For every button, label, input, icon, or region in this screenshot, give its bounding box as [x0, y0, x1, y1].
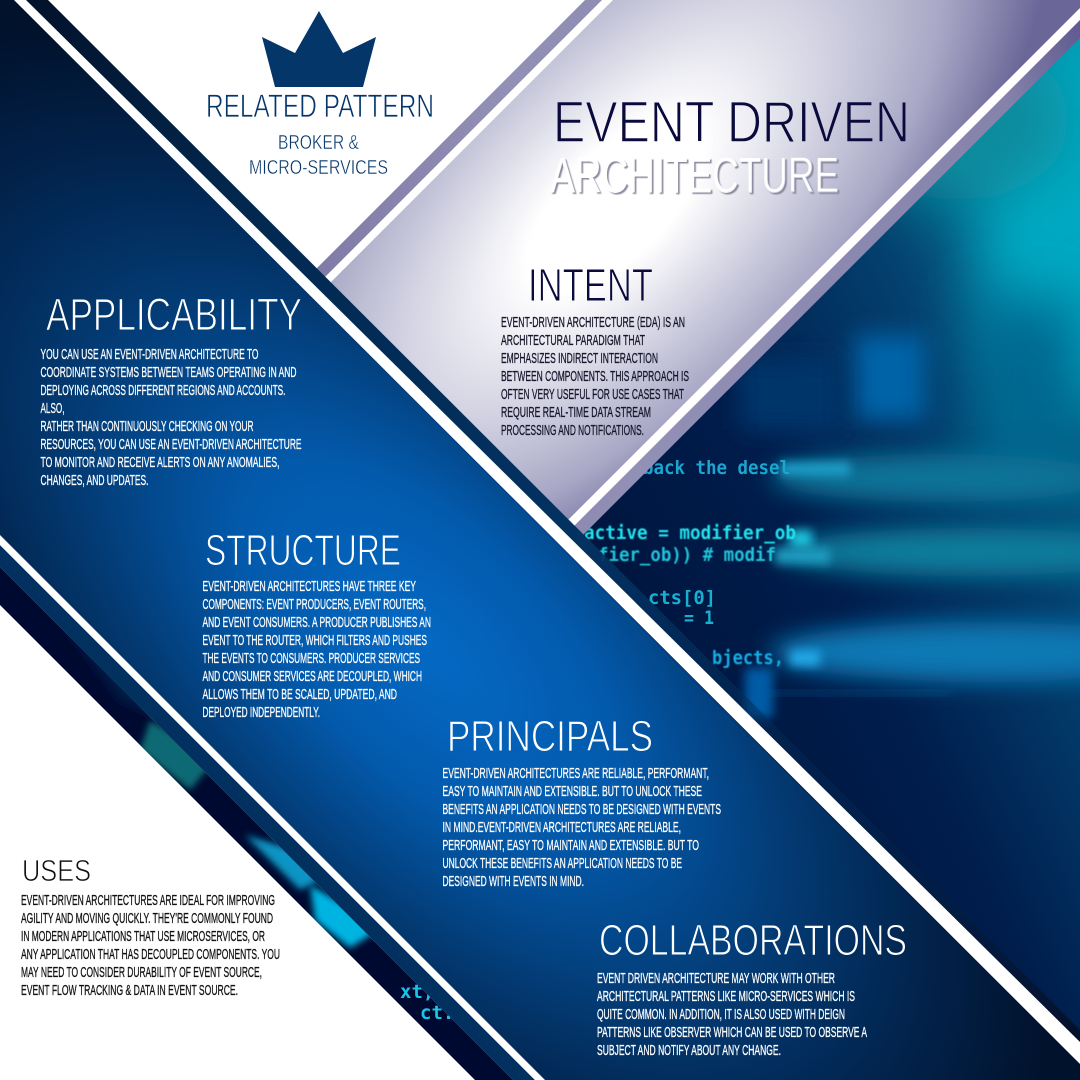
- section: structure: EVENT TO THE ROUTER, WHICH FILTERS AND PUSHES: [202, 632, 427, 649]
- section: uses: ANY APPLICATION THAT HAS DECOUPLED COMPONENTS. YOU: [21, 946, 280, 963]
- section: intent: [501, 259, 689, 439]
- heading: related pattern: BROKER &: [278, 132, 360, 154]
- heading: related pattern: RELATED PATTERN: [206, 88, 434, 124]
- section: structure: STRUCTURE: [205, 526, 401, 575]
- section: principals: IN MIND.EVENT-DRIVEN ARCHITECTURES ARE RELIABLE,: [442, 819, 681, 836]
- section: uses: MAY NEED TO CONSIDER DURABILITY OF EVENT SOURCE,: [21, 964, 262, 981]
- section: intent: INTENT: [528, 259, 653, 311]
- title: event driven architecture: ARCHITECTURE: [552, 149, 841, 205]
- section: collaborations: [597, 916, 907, 1059]
- section: intent: OFTEN VERY USEFUL FOR USE CASES THAT: [501, 386, 684, 403]
- section: collaborations: ARCHITECTURAL PATTERNS LIKE MICRO-SERVICES WHICH IS: [597, 988, 855, 1005]
- code text in photo: [584, 457, 796, 669]
- section: collaborations: SUBJECT AND NOTIFY ABOUT ANY CHANGE.: [597, 1042, 781, 1059]
- section: applicability: RESOURCES, YOU CAN USE AN EVENT-DRIVEN ARCHITECTURE: [40, 436, 302, 453]
- panel: lower diagonal band with photo detail: ct:: [420, 1002, 454, 1024]
- title: event driven architecture: EVENT DRIVEN: [553, 90, 910, 155]
- panel: silver title background: [330, 0, 1080, 528]
- section: intent: PROCESSING AND NOTIFICATIONS.: [501, 422, 644, 439]
- section: applicability: ALSO,: [40, 400, 64, 417]
- heading: related pattern: MICRO-SERVICES: [249, 157, 388, 179]
- code text in photo: = 1: [684, 607, 714, 629]
- section: intent: BETWEEN COMPONENTS. THIS APPROACH IS: [501, 368, 689, 385]
- section: applicability: CHANGES, AND UPDATES.: [40, 472, 148, 489]
- title: event driven architecture: [550, 90, 910, 205]
- panel: purple band with white stripes: [290, 0, 1080, 568]
- section: principals: UNLOCK THESE BENEFITS AN APPLICATION NEEDS TO BE: [442, 855, 682, 872]
- section: collaborations: PATTERNS LIKE OBSERVER WHICH CAN BE USED TO OBSERVE A: [597, 1024, 867, 1041]
- section: structure: EVENT-DRIVEN ARCHITECTURES HAVE THREE KEY: [202, 578, 416, 595]
- section: structure: ALLOWS THEM TO BE SCALED, UPDATED, AND: [202, 686, 397, 703]
- section: applicability: DEPLOYING ACROSS DIFFERENT REGIONS AND ACCOUNTS.: [40, 382, 286, 399]
- section: collaborations: COLLABORATIONS: [599, 916, 907, 965]
- code text in photo: back the desel: [643, 457, 790, 479]
- section: principals: EASY TO MAINTAIN AND EXTENSIBLE. BUT TO UNLOCK THESE: [442, 783, 702, 800]
- heading: related pattern: [206, 88, 434, 179]
- section: structure: AND EVENT CONSUMERS. A PRODUCER PUBLISHES AN: [202, 614, 431, 631]
- section: applicability: APPLICABILITY: [46, 289, 302, 340]
- section: collaborations: EVENT DRIVEN ARCHITECTURE MAY WORK WITH OTHER: [597, 970, 835, 987]
- code text in photo: fier_ob)) # modif: [598, 544, 776, 566]
- section: uses: EVENT FLOW TRACKING & DATA IN EVENT SOURCE.: [21, 982, 238, 999]
- code text in photo: cts[0]: [648, 587, 716, 609]
- section: structure: AND CONSUMER SERVICES ARE DECOUPLED, WHICH: [202, 668, 422, 685]
- background photo: blurred code screen: [574, 38, 1080, 1066]
- code text in photo: bjects,: [712, 647, 784, 669]
- section: structure: THE EVENTS TO CONSUMERS. PRODUCER SERVICES: [202, 650, 420, 667]
- section: uses: USES: [22, 853, 91, 888]
- icon: crown: [262, 11, 376, 87]
- title: event driven architecture: ARCHITECTURE: [550, 147, 839, 203]
- section: principals: EVENT-DRIVEN ARCHITECTURES ARE RELIABLE, PERFORMANT,: [442, 765, 709, 782]
- section: structure: [202, 526, 431, 721]
- section: applicability: [40, 289, 302, 489]
- section: principals: DESIGNED WITH EVENTS IN MIND.: [442, 873, 584, 890]
- section: applicability: YOU CAN USE AN EVENT-DRIVEN ARCHITECTURE TO: [40, 346, 258, 363]
- section: uses: [21, 853, 280, 999]
- section: principals: PRINCIPALS: [447, 712, 653, 761]
- section: structure: DEPLOYED INDEPENDENTLY.: [202, 704, 320, 721]
- section: principals: [442, 712, 721, 890]
- section: intent: REQUIRE REAL-TIME DATA STREAM: [501, 404, 651, 421]
- section: intent: EVENT-DRIVEN ARCHITECTURE (EDA) IS AN: [501, 314, 685, 331]
- panel: lower diagonal band with photo detail: xt,: [400, 981, 434, 1003]
- section: applicability: COORDINATE SYSTEMS BETWEEN TEAMS OPERATING IN AND: [40, 364, 297, 381]
- panel: lower diagonal band with photo detail: [0, 535, 545, 1080]
- section: intent: ARCHITECTURAL PARADIGM THAT: [501, 332, 645, 349]
- section: applicability: RATHER THAN CONTINUOUSLY CHECKING ON YOUR: [40, 418, 254, 435]
- section: collaborations: QUITE COMMON. IN ADDITION, IT IS ALSO USED WITH DEIGN: [597, 1006, 845, 1023]
- section: uses: EVENT-DRIVEN ARCHITECTURES ARE IDEAL FOR IMPROVING: [21, 892, 275, 909]
- section: principals: PERFORMANT, EASY TO MAINTAIN AND EXTENSIBLE. BUT TO: [442, 837, 699, 854]
- section: structure: COMPONENTS: EVENT PRODUCERS, EVENT ROUTERS,: [202, 596, 426, 613]
- section: uses: AGILITY AND MOVING QUICKLY. THEY'RE COMMONLY FOUND: [21, 910, 273, 927]
- section: intent: EMPHASIZES INDIRECT INTERACTION: [501, 350, 658, 367]
- section: uses: IN MODERN APPLICATIONS THAT USE MICROSERVICES, OR: [21, 928, 265, 945]
- code text in photo: active = modifier_ob: [584, 522, 796, 544]
- section: principals: BENEFITS AN APPLICATION NEEDS TO BE DESIGNED WITH EVENTS: [442, 801, 721, 818]
- section: applicability: TO MONITOR AND RECEIVE ALERTS ON ANY ANOMALIES,: [40, 454, 280, 471]
